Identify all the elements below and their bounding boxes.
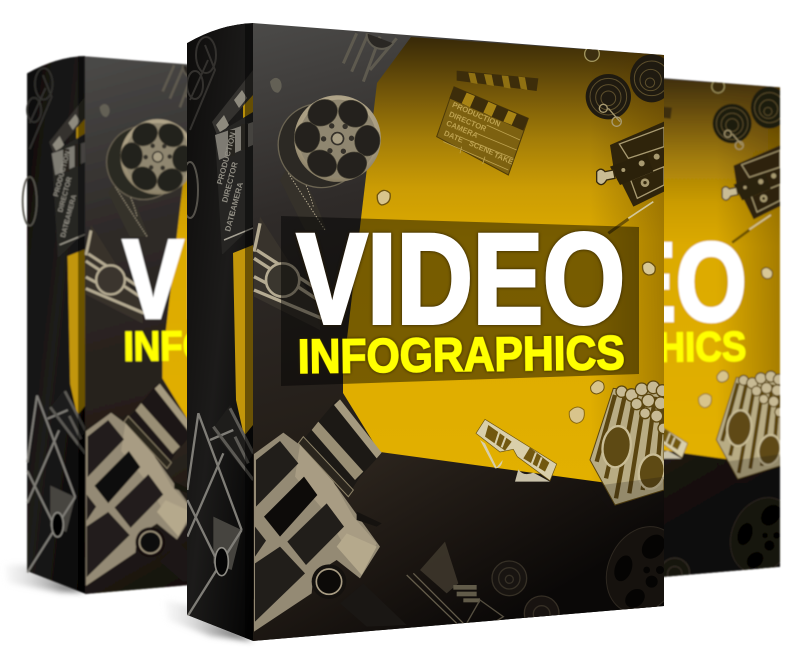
left box title: VIDEO [123, 218, 405, 341]
main box [182, 20, 694, 645]
spine clapboard: PRODUCTION [215, 131, 238, 186]
main box shadow [165, 600, 253, 641]
faint reel bottom right [593, 514, 694, 626]
yellow spotlight [343, 37, 664, 492]
right box title: VIDEO [464, 221, 746, 345]
left floor shadow [5, 565, 85, 592]
artwork in upper coordinates [262, 33, 673, 275]
back box: right [664, 77, 782, 578]
main box spine [182, 23, 253, 641]
main box front face [253, 20, 694, 645]
spine clapboard: DIRECTOR [220, 161, 240, 204]
spine clapboard [212, 70, 253, 254]
3D glasses [476, 419, 557, 482]
film roll with rays left [254, 217, 323, 330]
small kernels [569, 381, 604, 423]
spine corner shade [245, 23, 253, 641]
popcorn box [590, 381, 669, 510]
vintage camera [254, 399, 407, 632]
clapboard on spotlight: DIRECTOR [448, 110, 488, 134]
clapboard on spotlight: SCENE [468, 139, 495, 157]
spine camera lattice [187, 405, 253, 617]
title: VIDEO: VIDEO [297, 208, 625, 351]
face background [253, 20, 665, 645]
back box: left [20, 55, 187, 596]
title: INFOGRAPHICS: INFOGRAPHICS [297, 327, 625, 384]
spine clapboard: CAMERA [227, 181, 245, 218]
faint projector bottom [407, 542, 559, 631]
artwork in lower coordinates [254, 381, 694, 632]
film projector [586, 54, 673, 233]
clapboard on spotlight [437, 71, 538, 175]
title band [281, 216, 639, 386]
right box title: INFOGRAPHICS [465, 322, 747, 373]
clapboard on spotlight: TAKE [493, 150, 515, 166]
clapboard on spotlight: CAMERA [445, 119, 480, 140]
popcorn top left [270, 78, 282, 93]
left box title [123, 218, 405, 370]
popcorn kernel near reel [377, 190, 390, 205]
left box spine [23, 56, 85, 594]
lower dark floor [253, 452, 664, 645]
spine film reel strip [182, 37, 216, 218]
popcorn kernel right [643, 262, 655, 275]
spine yellow patches [233, 84, 253, 436]
clapboard on spotlight: PRODUCTION [451, 100, 502, 129]
film reel [262, 74, 399, 210]
popcorn stripes top [343, 33, 397, 82]
spine background [187, 23, 253, 641]
clapboard on spotlight: DATE [443, 129, 465, 145]
film strip [280, 163, 327, 230]
left box title: INFOGRAPHICS [123, 319, 405, 370]
spine clapboard: DATE [223, 209, 238, 233]
popcorn top right [585, 47, 599, 61]
spotlight edge shading [590, 50, 664, 492]
left box front face [84, 55, 187, 596]
